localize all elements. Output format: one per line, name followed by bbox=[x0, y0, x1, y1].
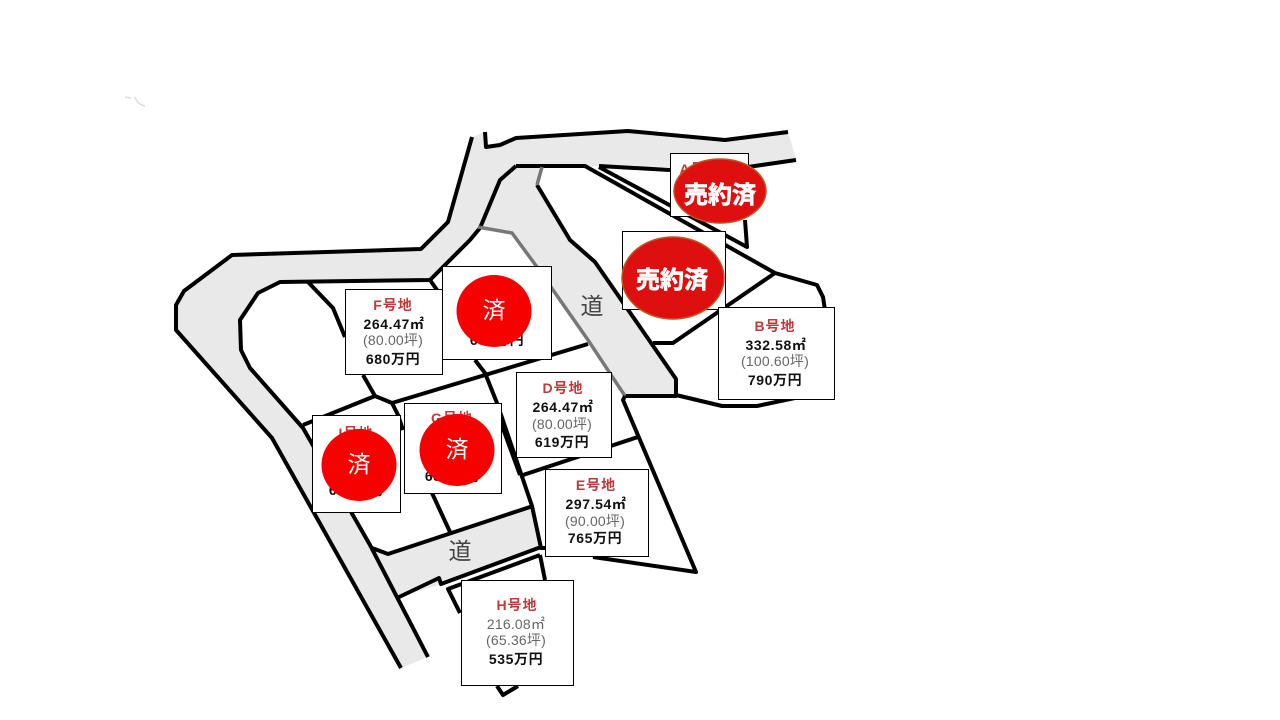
lot I label, sold circle: 680万円 bbox=[329, 482, 383, 498]
sold circle bbox=[420, 414, 494, 486]
lot D label: 619万円 bbox=[535, 434, 589, 450]
lot B label: (100.60坪) bbox=[741, 353, 809, 369]
lot G label, sold circle: G号地 bbox=[431, 410, 473, 426]
lot A label, sold bbox=[670, 154, 766, 223]
lot F label: 680万円 bbox=[366, 351, 420, 367]
lot E label bbox=[546, 470, 648, 556]
lot B label bbox=[718, 308, 834, 400]
lot I label, sold circle: 済 bbox=[348, 451, 370, 477]
road: middle road bbox=[478, 166, 676, 396]
lot D label bbox=[516, 372, 612, 458]
lot F label: 264.47㎡ bbox=[363, 316, 425, 332]
lot H label bbox=[462, 580, 574, 686]
lot I label, sold circle: I号地 bbox=[339, 425, 373, 441]
road: left and top road bbox=[176, 131, 796, 668]
sold badge A bbox=[674, 159, 766, 223]
sold circle bbox=[456, 275, 532, 347]
lot E label: 765万円 bbox=[568, 530, 622, 546]
lot label, sold circle bbox=[442, 266, 552, 360]
lot C label, sold bbox=[622, 232, 726, 319]
lot G label, sold circle: 済 bbox=[446, 436, 468, 462]
lot F label bbox=[346, 290, 442, 374]
lot D label: 264.47㎡ bbox=[532, 399, 594, 415]
lot B label: B号地 bbox=[754, 318, 796, 334]
lot A label, sold: 売約済 bbox=[684, 182, 756, 209]
lot H label: H号地 bbox=[496, 597, 538, 613]
road label: upper: 道 bbox=[580, 293, 604, 319]
lot boundary lines bbox=[176, 131, 833, 695]
lot E label: E号地 bbox=[576, 477, 616, 493]
lot label, sold circle: 680万円 bbox=[470, 332, 524, 348]
small corner mark bbox=[125, 97, 145, 106]
roads bbox=[176, 131, 796, 668]
lot label, sold circle: 済 bbox=[482, 297, 506, 323]
lot E label: (90.00坪) bbox=[565, 513, 625, 529]
lot G label, sold circle: 680万円 bbox=[425, 468, 479, 484]
lot B label: 332.58㎡ bbox=[745, 337, 807, 353]
lot B label: 790万円 bbox=[748, 372, 802, 388]
lot H label: 216.08㎡ bbox=[487, 616, 545, 632]
sold circle bbox=[322, 429, 396, 501]
lot E label: 297.54㎡ bbox=[565, 496, 627, 512]
road: lower road bbox=[372, 506, 541, 598]
lot I label, sold circle bbox=[312, 416, 400, 512]
sold badge C bbox=[622, 237, 724, 319]
lot H label: (65.36坪) bbox=[486, 632, 546, 648]
lot D label: D号地 bbox=[542, 380, 584, 396]
lot G label, sold circle bbox=[404, 404, 502, 494]
lot A label, sold: A号地 bbox=[679, 161, 721, 177]
road label: lower: 道 bbox=[448, 538, 472, 564]
lot F label: (80.00坪) bbox=[363, 332, 423, 348]
lot D label: (80.00坪) bbox=[532, 416, 592, 432]
lot F label: F号地 bbox=[373, 297, 413, 313]
lot C label, sold: 売約済 bbox=[636, 267, 708, 294]
lot H label: 535万円 bbox=[489, 651, 543, 667]
